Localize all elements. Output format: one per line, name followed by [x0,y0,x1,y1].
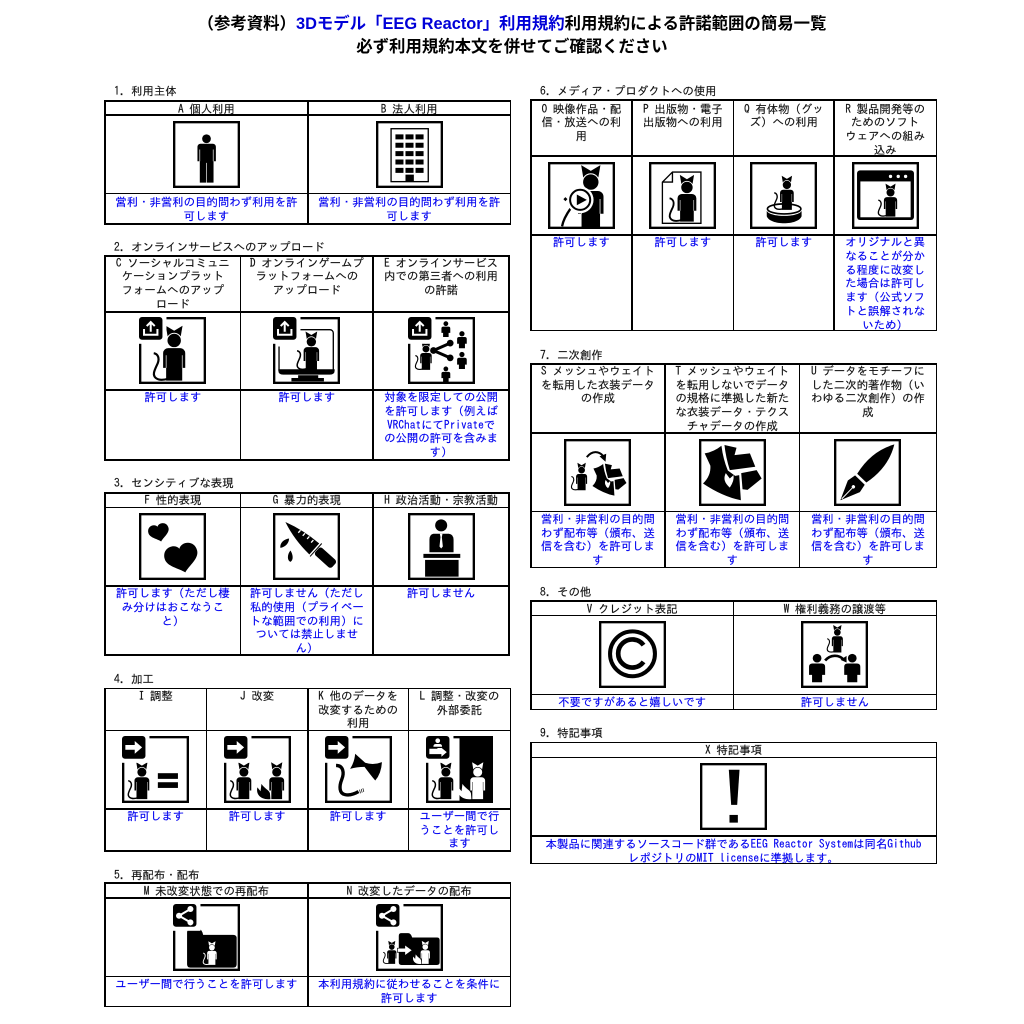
panel: 4 加工: 改変するための [318,704,398,716]
panel: 7 二次創作: を転用しないでデータ [675,380,789,390]
panel: 4 加工: ます [448,838,471,849]
panel: 2 オンラインサービスへのアップロード: ロード [156,299,190,310]
panel: 7 二次創作: S メッシュやウェイト [541,366,655,377]
icon: video play [548,162,615,229]
panel: 7 二次創作: わゆる二次創作）の作 [811,393,925,404]
panel: 7 二次創作: わず配布等（頒布、送 [811,528,925,539]
panel: 7 二次創作: U データをモチーフに [811,366,925,377]
panel: 6 メディア・プロダクトへの使用: ます（公式ソフ [845,292,925,303]
icon: copyright [599,621,666,688]
panel: 6 メディア・プロダクトへの使用: ズ）への利用 [750,117,818,128]
panel: 7 二次創作: の規格に準拠した新た [675,393,789,404]
panel: 2 オンラインサービスへのアップロード: 対象を限定しての公開 [384,392,498,403]
panel: 6 メディア・プロダクトへの使用: Q 有体物（グッ [744,104,824,115]
panel: 6 メディア・プロダクトへの使用: トと誤解されな [845,306,925,317]
panel: 4 加工: L 調整・改変の [420,691,499,702]
panel: 2 オンラインサービスへのアップロード: 許可します [278,392,335,403]
heading: section 1: 1. 利用主体 [114,86,177,97]
panel: 2 オンラインサービスへのアップロード: D オンラインゲームプ [250,258,364,268]
subtitle: 必ず利用規約本文を併せてご確認ください [356,38,668,56]
panel: 2 オンラインサービスへのアップロード: の公開の許可を含みま [384,433,498,444]
panel: 2 オンラインサービスへのアップロード: を許可します（例えば [384,406,498,417]
panel: 5 再配布・配布: 許可します [381,993,438,1004]
panel: 3 センシティブな表現: み分けはおこなうこ [122,602,224,613]
panel: 2 オンラインサービスへのアップロード: ラットフォームへの [256,271,358,282]
panel: 3 センシティブな表現: ん） [295,643,318,654]
panel: 4 加工: J 改変 [240,691,274,702]
heading: section 3: 3. センシティブな表現 [114,478,234,489]
icon: adjust (equals) [122,736,189,803]
icon: modified distribution [376,904,443,971]
panel: 6 メディア・プロダクトへの使用: ウェアへの組み [845,131,925,142]
panel: 3 センシティブな表現: と） [161,616,184,627]
title: （参考資料）3Dモデル「EEG Reactor」利用規約利用規約による許諾範囲の簡易一覧 [198,15,826,33]
icon: exclamation [700,763,767,830]
panel: 7 二次創作: わず配布等（頒布、送 [675,528,789,539]
panel: 6 メディア・プロダクトへの使用: オリジナルと異 [845,237,925,248]
panel: 6 メディア・プロダクトへの使用: る程度に改変し [845,265,925,276]
panel: 6 メディア・プロダクトへの使用: P 出版物・電子 [643,104,723,115]
panel: 8 その他: W 権利義務の譲渡等 [784,604,886,614]
panel: 9 特記事項: 本製品に関連するソースコード群であるEEG Reactor Systemは同名Github [546,839,921,850]
panel: 1 利用主体 [104,100,511,225]
panel: 4 加工 [104,688,511,852]
heading: section 9: 9. 特記事項 [540,728,603,739]
panel: 4 加工: 外部委託 [437,704,482,716]
icon: modify (two avatars) [224,736,291,803]
panel: 6 メディア・プロダクトへの使用: 出版物への利用 [643,117,723,128]
panel: 3 センシティブな表現: 許可しません（ただし [250,588,364,599]
panel: 2 オンラインサービスへのアップロード: アップロード [273,285,341,296]
panel: 3 センシティブな表現: F 性的表現 [144,495,201,506]
icon: game platform upload [273,317,340,384]
heading: section 7: 7. 二次創作 [540,350,603,361]
panel: 5 再配布・配布 [104,882,511,1007]
panel: 4 加工: うことを許可し [420,825,499,836]
panel: 4 加工: K 他のデータを [318,691,398,702]
panel: 7 二次創作: な衣装データ・テクス [675,407,789,418]
panel: 3 センシティブな表現 [104,492,510,656]
icon: office building [376,121,443,188]
panel: 8 その他: 不要ですがあると嬉しいです [558,697,706,708]
panel: 6 メディア・プロダクトへの使用: た場合は許可し [845,278,925,289]
icon: knife with drops [273,513,340,580]
panel: 8 その他 [530,600,937,710]
panel: 5 再配布・配布: ユーザー間で行うことを許可します [115,979,298,990]
panel: 1 利用主体: 営利・非営利の目的問わず利用を許 [318,197,500,208]
panel: 2 オンラインサービスへのアップロード: 許可します [144,392,201,403]
panel: 4 加工: 許可します [229,811,286,822]
panel: 6 メディア・プロダクトへの使用: 許可します [755,237,812,248]
panel: 3 センシティブな表現: ついては禁止しませ [256,629,358,640]
panel: 3 センシティブな表現: H 政治活動・宗教活動 [384,495,498,506]
panel: 4 加工: 許可します [330,811,387,822]
heading: section 2: 2. オンラインサービスへのアップロード [114,242,325,253]
panel: 4 加工: 許可します [127,811,184,822]
panel: 7 二次創作: 営利・非営利の目的問 [541,514,655,525]
panel: 8 その他: 許可しません [801,697,869,708]
panel: 3 センシティブな表現: G 暴力的表現 [273,495,341,506]
panel: 3 センシティブな表現: 許可しません [407,588,475,599]
panel: 2 オンラインサービスへのアップロード: す） [430,447,452,458]
panel: 7 二次創作: T メッシュやウェイト [675,366,789,377]
panel: 2 オンラインサービスへのアップロード: VRChatにてPrivateで [387,420,495,431]
panel: 7 二次創作: す [727,555,738,566]
panel: 6 メディア・プロダクトへの使用: ためのソフト [851,117,919,128]
panel: 7 二次創作: した二次的著作物（い [811,380,925,390]
panel: 4 加工: I 調整 [139,691,173,702]
panel: 3 センシティブな表現: 私的使用（プライベー [250,602,364,613]
panel: 2 オンラインサービスへのアップロード: 内での第三者への利用 [384,271,498,282]
panel: 7 二次創作: 信を含む）を許可しま [675,541,789,552]
heading: section 8: 8. その他 [540,587,591,598]
icon: software window [852,162,919,229]
icon: figure goods [750,162,817,229]
panel: 8 その他: V クレジット表記 [587,604,678,614]
panel: 7 二次創作: す [592,555,604,566]
panel: 7 二次創作: を転用した衣装データ [541,380,655,390]
panel: 2 オンラインサービスへのアップロード: ケーションプラット [122,271,224,282]
panel: 6 メディア・プロダクトへの使用: R 製品開発等の [845,104,925,115]
panel: 3 センシティブな表現: トな範囲での利用）に [250,616,364,627]
icon: hearts [139,513,206,580]
panel: 6 メディア・プロダクトへの使用: O 映像作品・配 [542,104,621,115]
panel: 7 二次創作: わず配布等（頒布、送 [541,528,655,539]
icon: avatar to costume [564,439,631,506]
icon: parts reuse (tail and ears) [325,736,392,803]
heading: section 6: 6. メディア・プロダクトへの使用 [540,86,717,97]
icon: speaker at podium [408,513,475,580]
panel: 1 利用主体: 可します [184,211,229,222]
panel: 2 オンラインサービスへのアップロード: C ソーシャルコミュニ [116,258,230,268]
panel: 6 メディア・プロダクトへの使用: 信・放送への利 [542,117,621,128]
panel: 9 特記事項: X 特記事項 [705,745,762,756]
panel: 4 加工: 利用 [347,718,370,729]
panel: 6 メディア・プロダクトへの使用: なることが分か [845,251,925,262]
panel: 5 再配布・配布: M 未改変状態での再配布 [144,886,269,897]
panel: 1 利用主体: 可します [386,211,432,222]
panel: 6 メディア・プロダクトへの使用: 許可します [654,237,711,248]
panel: 6 メディア・プロダクトへの使用: 用 [576,131,587,142]
panel: 7 二次創作: 営利・非営利の目的問 [675,514,789,525]
icon: publication [649,162,716,229]
icon: rights transfer [801,621,868,688]
panel: 2 オンラインサービスへのアップロード [104,255,510,461]
panel: 6 メディア・プロダクトへの使用 [530,99,937,331]
panel: 9 特記事項 [530,742,937,864]
icon: fountain pen [834,439,901,506]
panel: 2 オンラインサービスへのアップロード: E オンラインサービス [384,258,498,268]
panel: 7 二次創作: 信を含む）を許可しま [811,541,925,552]
panel: 1 利用主体: 営利・非営利の目的問わず利用を許 [115,197,298,208]
icon: person [173,121,240,188]
panel: 7 二次創作 [530,363,937,568]
panel: 4 加工: ユーザー間で行 [420,811,499,822]
icon: redistribute folder [173,904,240,971]
panel: 6 メディア・プロダクトへの使用: 許可します [553,237,610,248]
heading: section 4: 4. 加工 [114,674,154,685]
icon: outsourcing [426,736,493,803]
panel: 2 オンラインサービスへのアップロード: フォームへのアップ [122,285,224,296]
panel: 7 二次創作: す [862,555,874,566]
panel: 7 二次創作: チャデータの作成 [687,421,778,432]
panel: 7 二次創作: 信を含む）を許可しま [541,541,655,552]
panel: 7 二次創作: の作成 [581,393,615,404]
icon: costume [699,439,766,506]
icon: cat avatar upload [139,317,206,384]
icon: third party sharing [408,317,475,384]
heading: section 5: 5. 再配布・配布 [114,870,199,881]
panel: 2 オンラインサービスへのアップロード: の許諾 [424,285,458,296]
panel: 7 二次創作: 営利・非営利の目的問 [811,514,925,525]
panel: 3 センシティブな表現: 許可します（ただし棲 [116,588,230,599]
panel: 5 再配布・配布: N 改変したデータの配布 [347,886,472,897]
panel: 7 二次創作: 成 [862,407,874,418]
panel: 5 再配布・配布: 本利用規約に従わせることを条件に [318,979,500,990]
